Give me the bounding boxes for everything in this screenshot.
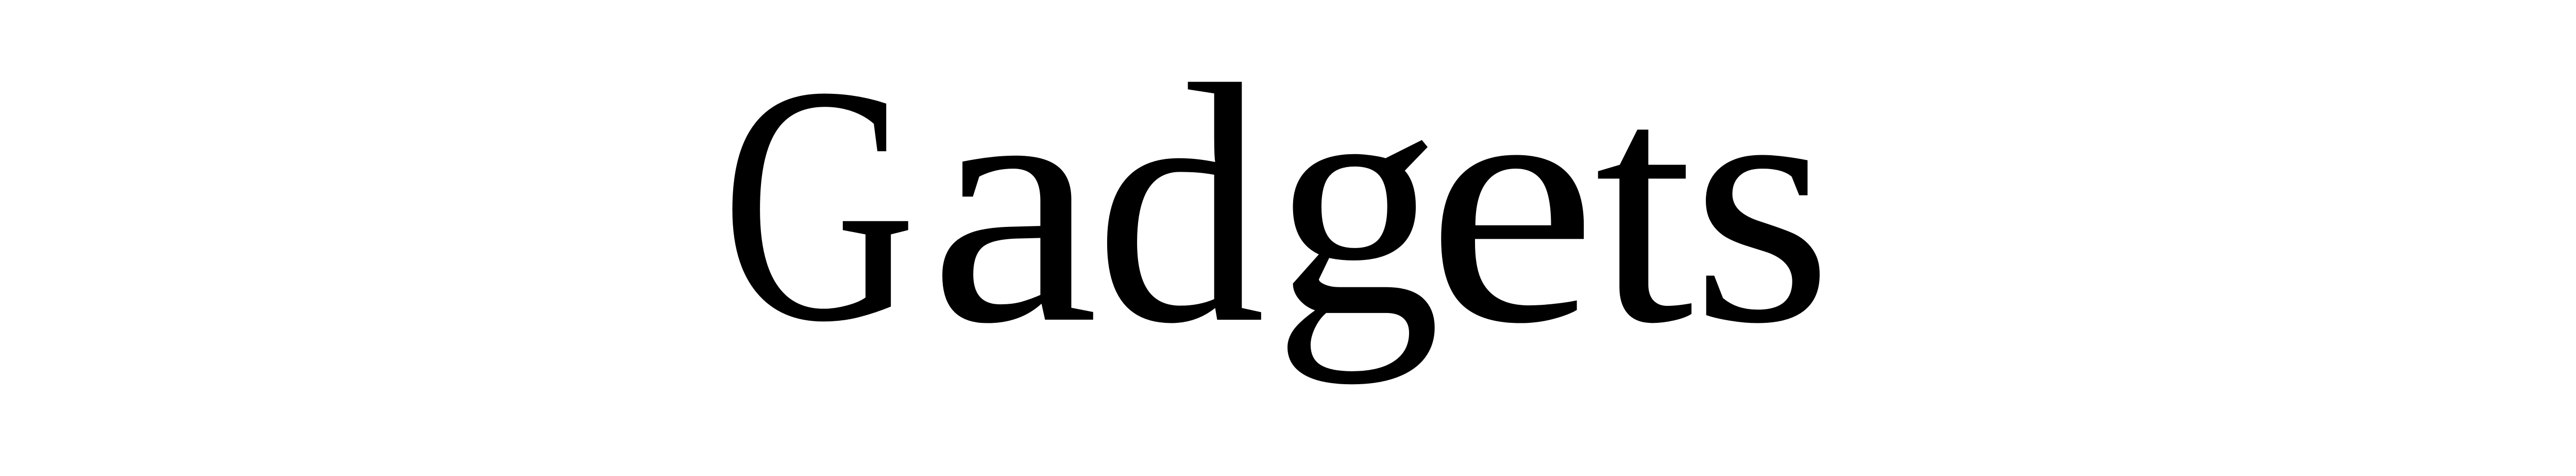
title: Gadgets xyxy=(721,8,1833,395)
title: Gadgets: s xyxy=(1691,8,1833,395)
title: Gadgets: a xyxy=(929,8,1098,395)
title: Gadgets: G xyxy=(721,15,917,391)
title: Gadgets: e xyxy=(1426,8,1597,395)
title: Gadgets: g xyxy=(1273,13,1441,384)
title: Gadgets: t xyxy=(1595,19,1693,392)
title: Gadgets: d xyxy=(1095,14,1265,393)
